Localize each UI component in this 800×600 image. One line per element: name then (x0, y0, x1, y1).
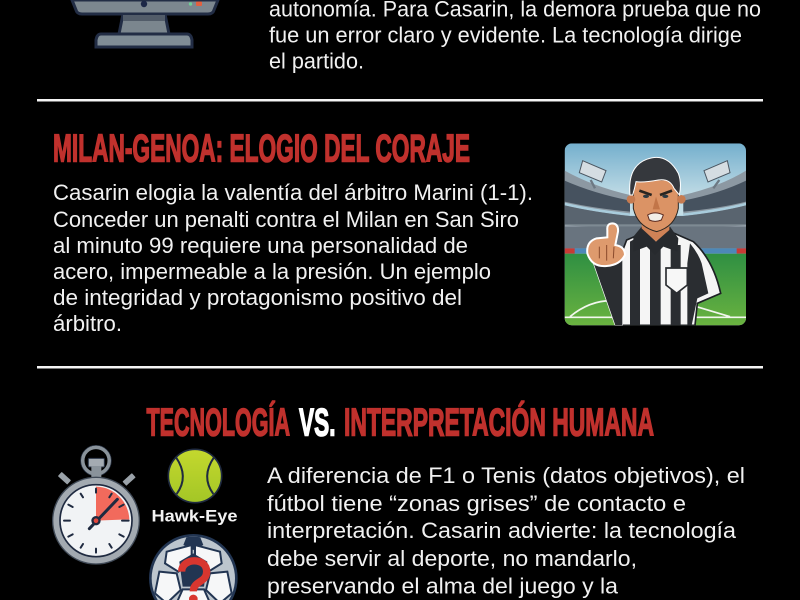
text: Milan-Genoa paragraph (53, 180, 533, 336)
text: technology paragraph: A diferencia de F1 o Tenis (datos objetivos), el (267, 463, 745, 488)
label: Hawk-Eye: Hawk-Eye (152, 506, 238, 526)
text: technology paragraph: interpretación. Casarin advierte: la tecnología (267, 518, 737, 543)
text: Milan-Genoa paragraph: árbitro. (53, 311, 122, 336)
neck and head (642, 224, 670, 242)
arm and hand (587, 223, 625, 266)
text: top paragraph ending: fue un error claro y evidente. La tecnología dirige (269, 23, 742, 48)
text: technology paragraph: preservando el alma del juego y la (267, 574, 619, 598)
icon: stopwatch (53, 445, 139, 564)
icon: soccer ball with question mark (149, 534, 238, 600)
text: technology paragraph (267, 463, 745, 598)
text: top paragraph ending: el partido. (269, 48, 364, 74)
text: Milan-Genoa paragraph: al minuto 99 requiere una personalidad de (53, 233, 468, 258)
heading: Tecnología vs. interpretación humana (146, 400, 654, 444)
text: Milan-Genoa paragraph: acero, impermeable a la presión. Un ejemplo (53, 259, 491, 284)
heading: Tecnología vs. interpretación humana: TECNOLOGÍA (146, 400, 290, 444)
icon: computer monitor (72, 0, 218, 47)
text: top paragraph ending (269, 0, 761, 74)
body (610, 230, 721, 325)
text: Milan-Genoa paragraph: Conceder un penalti contra el Milan en San Siro (53, 207, 519, 232)
text: Milan-Genoa paragraph: de integridad y protagonismo positivo del (53, 285, 462, 310)
illustration: referee pointing in stadium (565, 143, 746, 325)
heading: Milan-Genoa: MILAN-GENOA: ELOGIO DEL CORAJE (53, 128, 470, 170)
text: Milan-Genoa paragraph: Casarin elogia la valentía del árbitro Marini (1-1). (53, 180, 533, 205)
text: technology paragraph: fútbol tiene “zonas grises” de contacto e (267, 491, 686, 516)
heading: Tecnología vs. interpretación humana: VS. (299, 402, 336, 444)
icon: tennis ball (168, 449, 222, 503)
text: technology paragraph: debe servir al deporte, no mandarlo, (267, 546, 637, 571)
